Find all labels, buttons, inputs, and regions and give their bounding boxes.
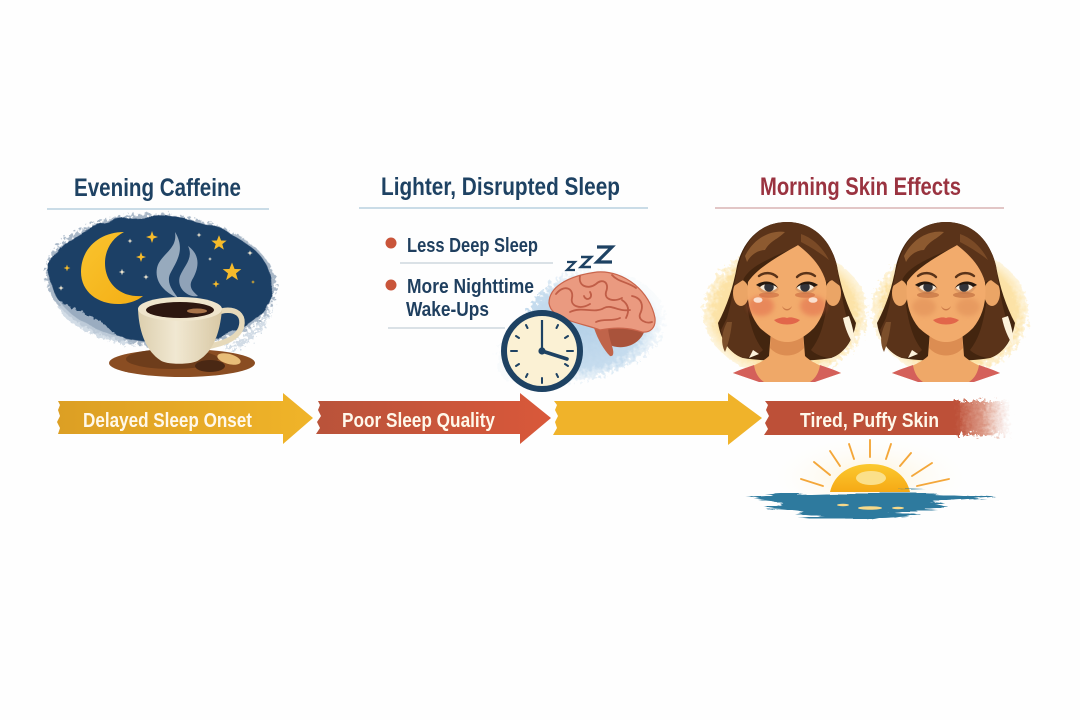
heading: Evening Caffeine: Evening Caffeine bbox=[74, 174, 241, 202]
panel: morning skin effects bbox=[703, 173, 1028, 382]
bar: tired puffy skin bbox=[764, 401, 1010, 435]
heading: Lighter, Disrupted Sleep: Lighter, Disrupted Sleep bbox=[381, 173, 620, 201]
icon: stars bbox=[64, 231, 241, 288]
sun dome bbox=[830, 464, 910, 492]
panel: evening caffeine bbox=[42, 174, 280, 377]
face: after, dark circles bbox=[877, 222, 1015, 382]
arrow: empty gold bbox=[553, 393, 762, 445]
bullet: more nighttime wake-ups: More Nighttime bbox=[407, 276, 534, 298]
arrow: poor sleep quality: Poor Sleep Quality bbox=[342, 410, 496, 432]
night sky illustration bbox=[42, 207, 280, 377]
arrow: delayed sleep onset: Delayed Sleep Onset bbox=[83, 410, 252, 432]
glow behind faces bbox=[703, 248, 867, 376]
arrow: delayed sleep onset bbox=[57, 393, 313, 444]
bar: tired puffy skin: Tired, Puffy Skin bbox=[800, 410, 939, 432]
panel: lighter disrupted sleep bbox=[359, 173, 664, 389]
icon: brain bbox=[549, 272, 655, 356]
bullet: more nighttime wake-ups bbox=[386, 276, 534, 321]
icon: clock bbox=[504, 313, 580, 389]
heading: Morning Skin Effects: Morning Skin Effects bbox=[760, 173, 961, 201]
water bbox=[746, 492, 996, 519]
icon: sunrise over water bbox=[746, 434, 996, 522]
arrow: poor sleep quality bbox=[316, 393, 551, 444]
icon: coffee cup bbox=[200, 310, 242, 348]
icon: saucer bbox=[109, 349, 255, 377]
bullet: less deep sleep: Less Deep Sleep bbox=[407, 235, 538, 257]
sun rays bbox=[801, 440, 949, 486]
icon: steam bbox=[157, 232, 180, 298]
icon: crescent moon bbox=[81, 232, 143, 304]
blue blotch behind brain bbox=[497, 270, 664, 385]
bullet: more nighttime wake-ups: Wake-Ups bbox=[406, 299, 489, 321]
icon: zzz bbox=[567, 247, 612, 270]
icon: cookie bbox=[216, 351, 242, 367]
face: before, puffy with blush bbox=[718, 222, 856, 382]
